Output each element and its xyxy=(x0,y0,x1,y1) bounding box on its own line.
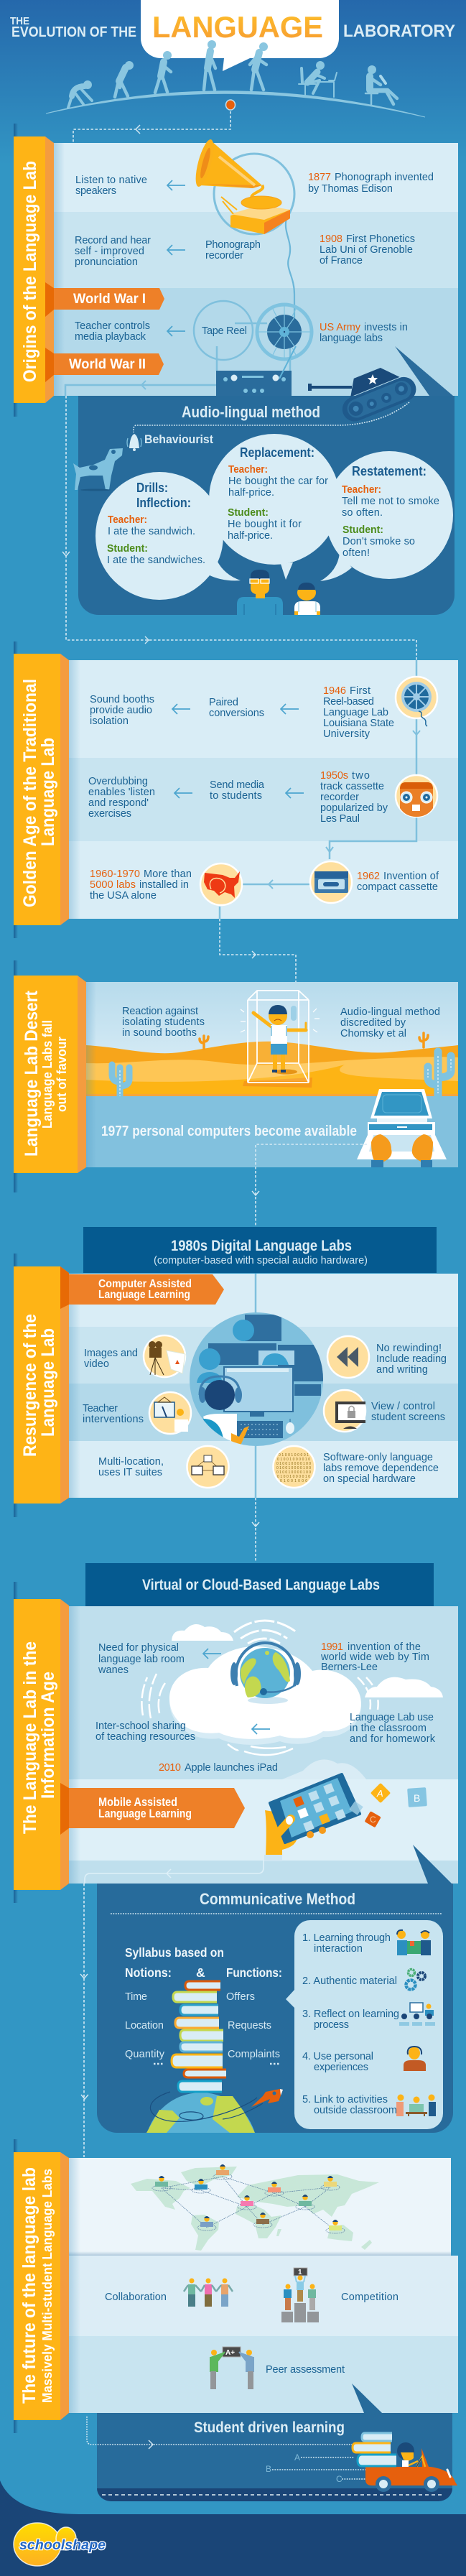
tab: language lab desert: out of favour xyxy=(55,1037,69,1112)
tab: language lab desert xyxy=(14,976,86,1173)
golden age text: conversions xyxy=(209,708,264,719)
panel: communicative method: Syllabus based on xyxy=(125,1945,224,1960)
origins text: First Phonetics xyxy=(346,233,415,245)
golden age text: Overdubbing xyxy=(88,776,148,787)
golden age text: enables 'listen xyxy=(88,787,155,798)
speech bubble: restatement: Student: xyxy=(342,524,383,536)
panel: communicative method: Notions: xyxy=(125,1965,172,1980)
speech bubble: replacement: Replacement: xyxy=(240,445,314,460)
icon: people at table xyxy=(396,2095,436,2116)
peer assessment: A+ xyxy=(225,2349,235,2357)
speech bubble: drills: Student: xyxy=(107,542,148,555)
icon: podium: 1 xyxy=(298,2269,302,2276)
collaboration and competition xyxy=(105,2268,399,2322)
tab: future xyxy=(14,2152,69,2420)
golden age text: Sound booths xyxy=(90,694,154,705)
icon: binary code xyxy=(273,1446,314,1488)
resurgence text: Include reading xyxy=(376,1353,447,1365)
icon: binary code: 010010000100 xyxy=(276,1470,311,1475)
speech bubble: drills: I ate the sandwiches. xyxy=(107,555,205,566)
desert text: Chomsky et al xyxy=(340,1028,406,1039)
icon: compact cassette xyxy=(310,861,352,903)
icon: binary code: 01001000010 xyxy=(277,1475,310,1479)
tab: language lab desert: Language Lab Desert xyxy=(22,990,42,1157)
behaviourist: bell and dog xyxy=(73,431,213,491)
icon: cacti xyxy=(112,1033,451,1096)
golden age text: provide audio xyxy=(90,705,152,716)
icons: letter tiles: B xyxy=(414,1792,420,1804)
panel: student driven learning xyxy=(87,2383,452,2501)
tab: origins xyxy=(14,136,54,403)
desert text: Audio-lingual method xyxy=(340,1006,440,1018)
speech bubble: replacement: half-price. xyxy=(228,487,274,499)
icons: letter tiles xyxy=(349,1783,427,1827)
panel: student driven learning: C xyxy=(336,2474,342,2484)
connector: section 1 to section 2 xyxy=(62,396,416,660)
tab: golden age: Golden Age of the Traditional xyxy=(20,679,40,907)
icon: binary code: 01001000010 xyxy=(277,1458,310,1462)
icon: collaboration figures xyxy=(184,2279,233,2307)
panel: communicative method: Location xyxy=(125,2020,164,2031)
panel: student driven learning: A xyxy=(294,2452,300,2463)
icon: podium xyxy=(281,2268,319,2322)
section 6 panel: future of the language lab xyxy=(14,2139,458,2433)
desert text: Reaction against xyxy=(122,1006,198,1017)
central illustration: computer lab xyxy=(190,1312,323,1446)
golden age text: Louisiana State xyxy=(323,718,394,729)
speech bubble: restatement: often! xyxy=(342,547,370,559)
golden age text: Paired xyxy=(209,697,238,708)
speech bubble: restatement: Tell me not to smoke xyxy=(342,496,439,507)
resurgence text: labs remove dependence xyxy=(323,1463,439,1474)
title xyxy=(10,0,455,71)
golden age text: Language Lab xyxy=(323,707,388,718)
golden age text: to students xyxy=(210,790,262,802)
speech bubble: replacement: He bought the car for xyxy=(228,476,328,487)
tab: resurgence: Resurgence of the xyxy=(20,1314,40,1457)
panel: audio-lingual method xyxy=(78,346,455,615)
speech bubble: restatement: Teacher: xyxy=(342,483,381,496)
peer assessment xyxy=(210,2347,345,2389)
speech bubble: drills: Drills: xyxy=(136,481,168,495)
connector: section 2 to section 3 xyxy=(220,907,296,995)
banner: mobile assisted language learning xyxy=(69,1788,245,1828)
desert text: discredited by xyxy=(340,1017,406,1029)
banner: computer assisted language learning xyxy=(60,1266,224,1309)
evolution silhouettes on hill xyxy=(46,40,425,117)
golden age text: installed in xyxy=(139,879,189,891)
icon: phonograph xyxy=(192,138,294,345)
book stack xyxy=(172,1981,226,2092)
origins text: speakers xyxy=(75,185,116,197)
heading: 1980s digital language labs xyxy=(83,1227,437,1273)
icon: locked screen xyxy=(324,1390,365,1432)
heading: virtual or cloud-based language labs: Virtual or Cloud-Based Language Labs xyxy=(142,1577,380,1593)
information age text xyxy=(95,1641,436,1774)
tab: information age xyxy=(14,1599,69,1890)
illustration: stack of books on earth xyxy=(146,1980,283,2133)
speech bubble: drills: Inflection: xyxy=(136,496,191,510)
information age text: world wide web by Tim xyxy=(320,1651,429,1663)
icon: class with teacher xyxy=(399,2003,435,2026)
section 2 panel: golden age xyxy=(14,641,458,938)
resurgence text: Teacher xyxy=(83,1403,118,1414)
origins text: Phonograph xyxy=(205,239,261,251)
origins text: media playback xyxy=(75,331,146,343)
information age text: Need for physical xyxy=(98,1642,179,1654)
icon: binary code: 01001000 xyxy=(280,1479,307,1483)
banner: World War II: World War II xyxy=(69,357,146,372)
icons: features xyxy=(144,1335,369,1488)
tab: golden age xyxy=(14,654,69,925)
tab: future: The future of the language lab xyxy=(19,2167,39,2404)
start dot xyxy=(225,100,236,110)
origins text: pronunciation xyxy=(75,256,138,268)
student nodes xyxy=(152,2164,345,2233)
icons: letter tiles: C xyxy=(370,1815,376,1825)
panel: communicative method: Requests xyxy=(228,2020,271,2031)
speech bubble: restatement: Restatement: xyxy=(352,464,427,478)
tab: language lab desert: Language Labs fall xyxy=(40,1020,55,1129)
tab: resurgence: Language Lab xyxy=(38,1328,58,1437)
origins text: language labs xyxy=(320,333,383,344)
origins text: Record and hear xyxy=(75,235,151,246)
panel: student driven learning: B xyxy=(266,2464,271,2474)
speech bubble: drills: Teacher: xyxy=(108,514,147,526)
golden age text: Send media xyxy=(210,779,265,791)
speech bubble: replacement: Teacher: xyxy=(228,463,268,476)
information age text: and for homework xyxy=(350,1733,436,1745)
speech bubble: drills xyxy=(95,472,241,600)
origins text: Listen to native xyxy=(75,175,147,186)
origins text: invests in xyxy=(364,322,408,333)
section 3 panel: desert xyxy=(14,960,458,1192)
information age text: Inter-school sharing xyxy=(95,1720,186,1732)
icons: letter tiles: A xyxy=(376,1788,383,1799)
panel: communicative method: Functions: xyxy=(226,1965,282,1980)
origins text: recorder xyxy=(205,250,243,261)
desert text xyxy=(101,1006,440,1139)
golden age text: Les Paul xyxy=(320,813,360,825)
banner: World War I: World War I xyxy=(73,292,146,307)
banner: mobile assisted language learning: Mobile Assisted xyxy=(98,1796,177,1809)
golden age text: First xyxy=(350,685,371,697)
connector: dashed line to future section xyxy=(80,1884,88,2157)
information age text: of teaching resources xyxy=(95,1731,195,1743)
golden age text: the USA alone xyxy=(90,890,157,902)
panel: communicative principles list: 2. Authentic material xyxy=(302,1975,397,1987)
panel: audio-lingual method: Audio-lingual method xyxy=(182,403,320,421)
information age text: Berners-Lee xyxy=(321,1662,378,1673)
banner: computer assisted language learning: Language Learning xyxy=(98,1289,190,1301)
icon: film reel xyxy=(396,677,437,726)
information age text: Apple launches iPad xyxy=(185,1762,278,1774)
speech bubble: replacement: He bought it for xyxy=(228,519,302,530)
logo: schoolshape: schoolshape xyxy=(19,2538,106,2553)
golden age text: 1950s xyxy=(320,770,348,782)
illustration: car carrying books xyxy=(353,2433,457,2492)
peer assessment: Peer assessment xyxy=(266,2364,345,2376)
resurgence text: interventions xyxy=(83,1414,144,1425)
icon: binary code: 010010000100 xyxy=(276,1466,311,1470)
panel: communicative principles list: experiences xyxy=(314,2062,368,2073)
panel: communicative principles list: 5. Link to activities xyxy=(302,2094,388,2105)
tab: golden age: Language Lab xyxy=(38,738,58,846)
banner: computer assisted language learning: Computer Assisted xyxy=(98,1278,192,1290)
panel: communicative principles list: process xyxy=(314,2019,349,2031)
speech bubble: restatement: Don't smoke so xyxy=(342,536,415,547)
panel: communicative method: & xyxy=(196,1965,205,1980)
connector: section 3 to section 4 xyxy=(252,1144,367,1226)
information age text: Language Lab use xyxy=(350,1712,434,1723)
golden age text: Reel-based xyxy=(323,696,374,708)
information age text: wanes xyxy=(98,1664,129,1676)
icon: people interacting xyxy=(397,1930,431,1955)
panel: communicative method: Communicative Method xyxy=(200,1890,355,1908)
speech bubble: replacement xyxy=(209,434,340,580)
panel: student driven learning: Student driven learning xyxy=(194,2419,345,2436)
panel: communicative method: Quantity xyxy=(125,2049,165,2060)
panel: communicative method xyxy=(85,1845,453,2133)
icon: tape reel machine xyxy=(65,301,312,396)
tab: future: Massively Multi-student Language Labs xyxy=(40,2169,55,2403)
speech bubble: replacement: Student: xyxy=(228,506,269,519)
collaboration and competition: Collaboration xyxy=(105,2292,167,2303)
title: LANGUAGE xyxy=(152,10,323,44)
speech bubble: restatement: so often. xyxy=(342,507,383,519)
panel: communicative method: Offers xyxy=(226,1991,255,2003)
golden age text xyxy=(88,685,439,902)
speech bubble: replacement: half-price. xyxy=(228,530,273,542)
timeline connectors xyxy=(242,660,420,889)
section 4 panel: resurgence xyxy=(14,1254,458,1517)
resurgence text: No rewinding! xyxy=(376,1343,442,1354)
desert text: isolating students xyxy=(122,1016,205,1028)
resurgence text: View / control xyxy=(371,1401,435,1412)
resurgence text: uses IT suites xyxy=(98,1467,162,1478)
banner: World War II xyxy=(45,348,164,382)
origins text: 1908 xyxy=(320,233,342,245)
resurgence text xyxy=(83,1343,447,1485)
icon: binary code: 0100100001 xyxy=(279,1453,309,1458)
information age text: language lab room xyxy=(98,1654,185,1665)
illustration: globe on cloud xyxy=(141,1621,443,1755)
icon: tape reel machine: Tape Reel xyxy=(202,325,247,337)
title: LABORATORY xyxy=(343,22,455,41)
origins text: Lab Uni of Grenoble xyxy=(320,244,413,256)
resurgence text: Software-only language xyxy=(323,1452,433,1463)
information age text: invention of the xyxy=(348,1641,421,1653)
behaviourist: bell and dog: Behaviourist xyxy=(144,432,213,446)
resurgence text: on special hardware xyxy=(323,1473,416,1485)
golden age text: isolation xyxy=(90,715,129,727)
golden age text: More than xyxy=(144,868,192,880)
illustration: tablet in hand xyxy=(264,1759,366,1861)
icon: rewind xyxy=(327,1336,369,1378)
logo: schoolshape xyxy=(14,2523,106,2566)
golden age text: 1962 xyxy=(357,871,380,882)
section 1 panel: origins xyxy=(14,124,458,417)
golden age text: Invention of xyxy=(383,871,439,882)
icon: gears xyxy=(406,1970,425,1990)
banner: mobile assisted language learning: Language Learning xyxy=(98,1807,192,1820)
golden age text: 1960-1970 xyxy=(90,868,140,880)
title: THE xyxy=(10,15,29,27)
golden age text: popularized by xyxy=(320,802,388,814)
icon: student in sound booth xyxy=(241,991,320,1088)
icon: cassette recorder xyxy=(396,775,437,817)
golden age text: University xyxy=(323,728,371,740)
resurgence text: video xyxy=(84,1358,109,1370)
golden age text: recorder xyxy=(320,792,359,803)
banner: World War I xyxy=(45,282,164,317)
panel: communicative principles list: 3. Reflect on learning xyxy=(302,2009,399,2020)
origins text: by Thomas Edison xyxy=(308,183,393,195)
icon: teacher at board xyxy=(149,1392,191,1434)
icon: tank xyxy=(308,358,420,425)
desert text: 1977 personal computers become available xyxy=(101,1123,357,1139)
information age text: 2010 xyxy=(159,1762,181,1774)
icon: personal computer xyxy=(357,1089,447,1167)
information age text: in the classroom xyxy=(350,1723,427,1734)
resurgence text: Multi-location, xyxy=(98,1456,164,1468)
heading: virtual or cloud-based language labs xyxy=(85,1563,434,1606)
panel: communicative principles list xyxy=(286,1920,443,2129)
icon: network xyxy=(187,1446,228,1488)
world map with connected students xyxy=(131,2164,379,2251)
heading: 1980s digital language labs: 1980s Digital Language Labs xyxy=(171,1238,352,1254)
information age text: 1991 xyxy=(321,1641,343,1653)
panel: communicative principles list: 1. Learning through xyxy=(302,1932,391,1944)
connector: dot to phonograph xyxy=(73,111,230,161)
icon: binary code: 010010000100 xyxy=(276,1462,311,1466)
panel: communicative principles list: interaction xyxy=(314,1943,363,1955)
golden age text: exercises xyxy=(88,808,131,820)
resurgence text: student screens xyxy=(371,1412,445,1423)
origins text: Phonograph invented xyxy=(335,172,434,183)
golden age text: and respond' xyxy=(88,797,149,809)
desert text: in sound booths xyxy=(122,1027,197,1039)
heading: 1980s digital language labs: (computer-based with special audio hardware) xyxy=(154,1255,368,1266)
connector: section 4 to section 5 xyxy=(252,1498,259,1561)
section 5 panel: information age xyxy=(14,1582,458,1903)
golden age text: two xyxy=(352,770,370,782)
icon: person with headset xyxy=(404,2047,426,2071)
golden age text: compact cassette xyxy=(357,881,438,893)
title: EVOLUTION OF THE xyxy=(11,24,136,40)
golden age text: track cassette xyxy=(320,781,384,792)
origins text: 1877 xyxy=(308,172,331,183)
golden age text: 5000 labs xyxy=(90,879,136,891)
origins text: self - improved xyxy=(75,246,144,257)
tab: information age: The Language Lab in the xyxy=(20,1641,40,1834)
origins text xyxy=(75,172,434,344)
resurgence text: Images and xyxy=(84,1348,138,1359)
origins text: of France xyxy=(320,255,363,267)
speech bubble: drills: I ate the sandwich. xyxy=(108,526,195,537)
tab: origins: Origins of the Language Lab xyxy=(20,161,40,382)
golden age text: 1946 xyxy=(323,685,346,697)
panel: communicative method: Complaints xyxy=(228,2049,280,2060)
speech bubble: restatement xyxy=(320,451,453,581)
tab: resurgence xyxy=(14,1266,69,1504)
origins text: Teacher controls xyxy=(75,320,150,332)
panel: communicative principles list: 4. Use personal xyxy=(302,2051,373,2062)
teacher and student figures xyxy=(237,570,320,615)
origins text: US Army xyxy=(320,322,361,333)
tab: information age: Information Age xyxy=(38,1672,58,1799)
icon: USA map xyxy=(200,863,242,905)
collaboration and competition: Competition xyxy=(341,2292,399,2303)
resurgence text: and writing xyxy=(376,1364,428,1376)
panel: communicative method: Time xyxy=(125,1991,147,2003)
icon: film camera xyxy=(144,1335,185,1377)
panel: communicative principles list: outside classroom xyxy=(314,2105,397,2116)
